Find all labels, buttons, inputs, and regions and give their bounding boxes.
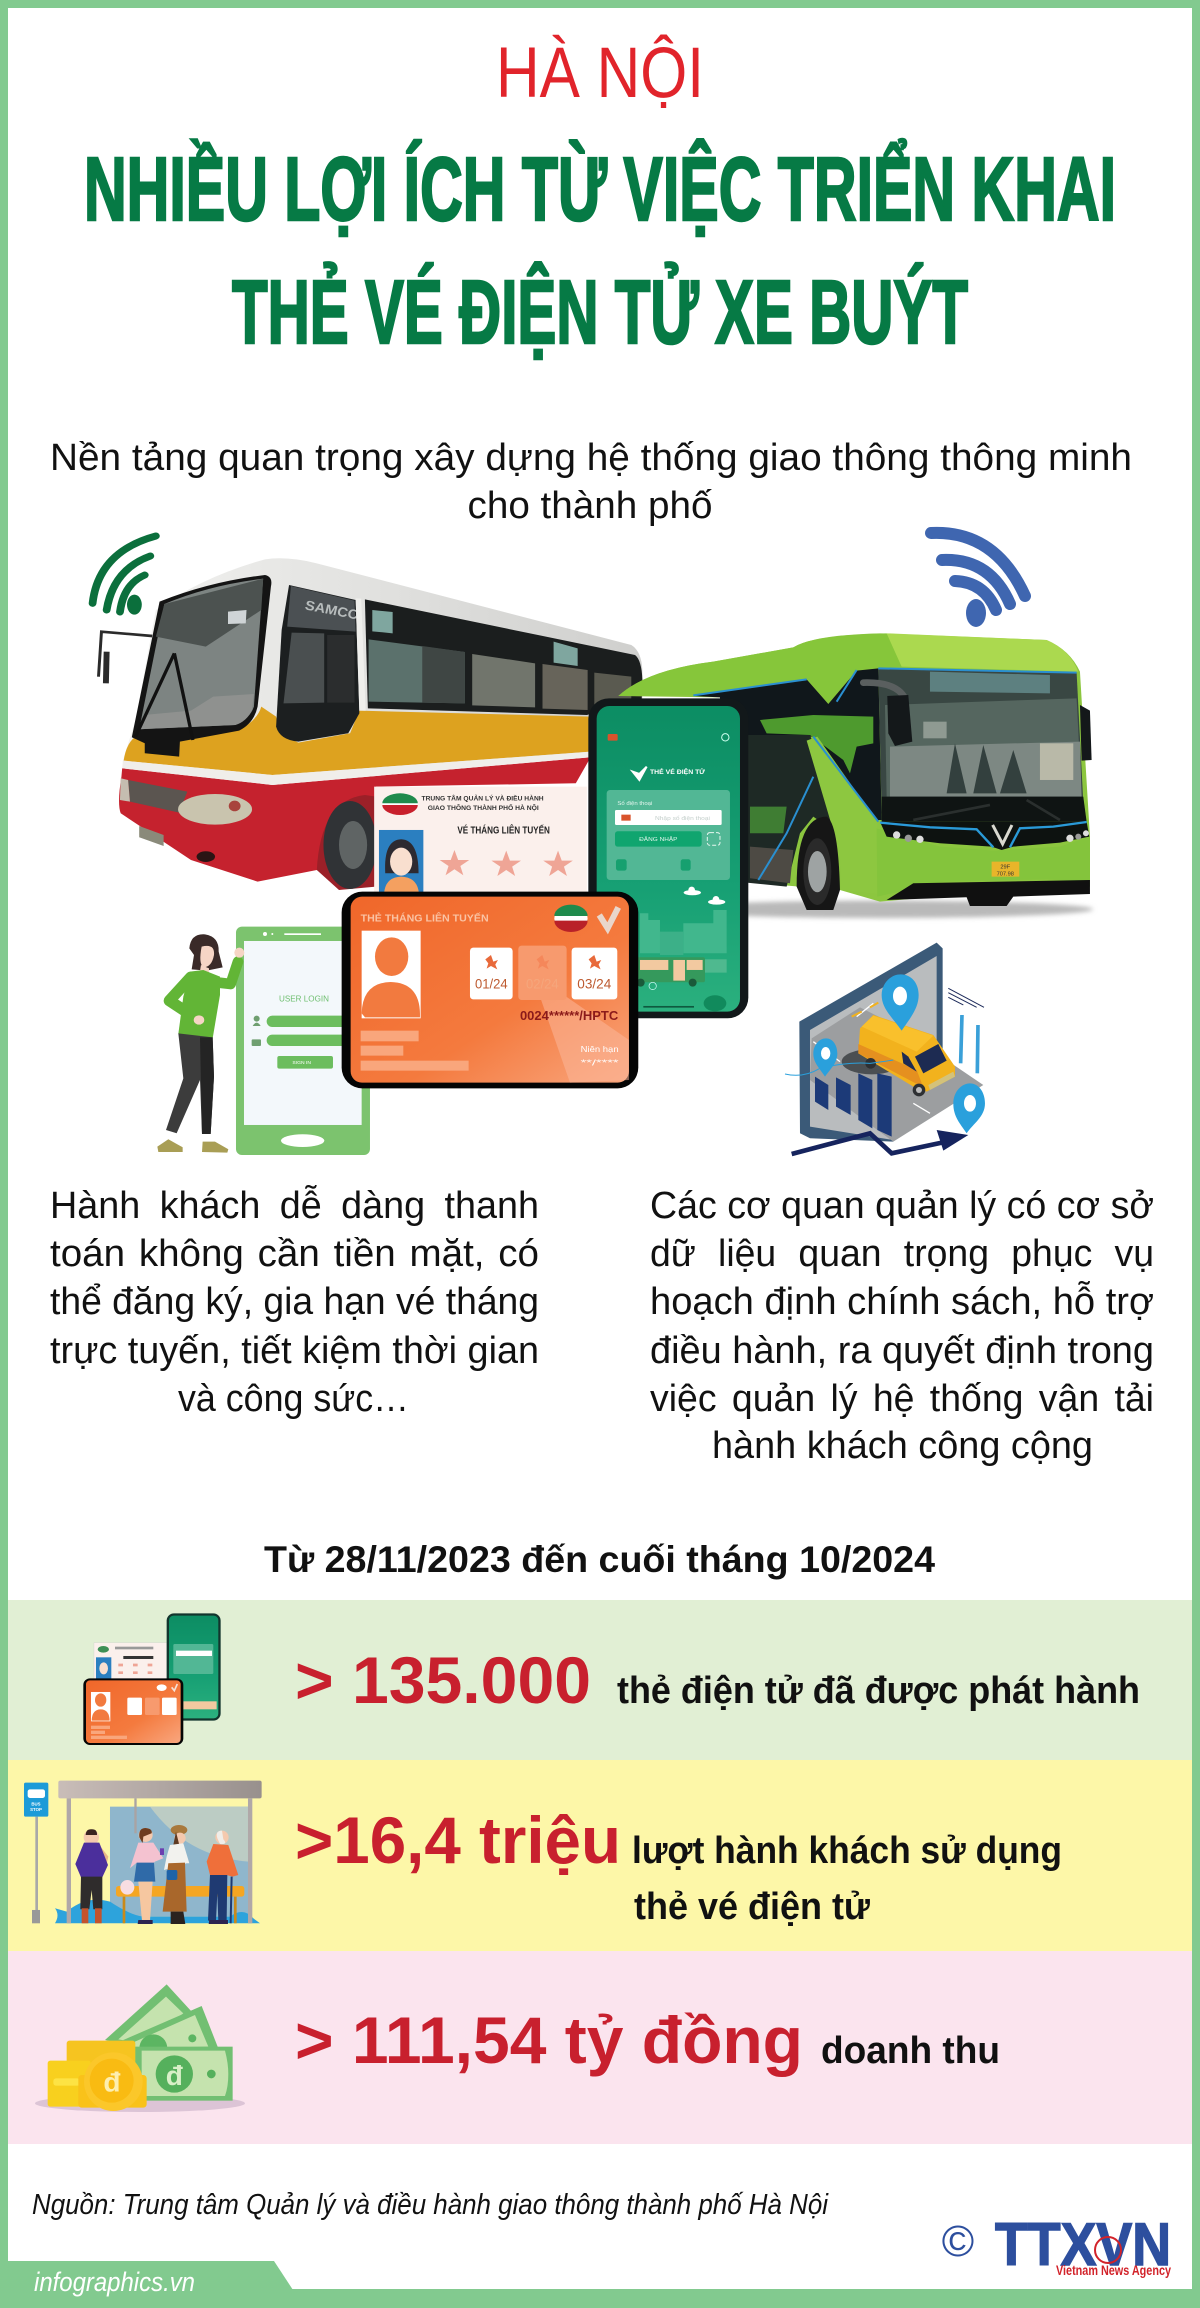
yellow band bbox=[124, 707, 591, 775]
coins: đ bbox=[103, 2067, 121, 2098]
ground shadow bbox=[667, 901, 1093, 918]
icon: van on map screen bbox=[785, 943, 985, 1154]
label: passengers: lượt hành khách sử dụng bbox=[632, 1830, 1062, 1872]
card number: 0024******/HPTC bbox=[520, 1009, 618, 1023]
woman with pink top bbox=[120, 1828, 164, 1924]
card logo and check mark bbox=[554, 905, 618, 932]
text block: passenger benefits: Hành khách dễ dàng thanh bbox=[50, 1184, 539, 1227]
source line: Nguồn: Trung tâm Quản lý và điều hành giao thông thành phố Hà Nội bbox=[32, 2189, 829, 2221]
app header: THẺ VÉ ĐIỆN TỬ bbox=[650, 767, 705, 776]
red lower body bbox=[119, 757, 591, 882]
orange monthly card bbox=[342, 892, 638, 1088]
skirt bbox=[887, 880, 1090, 906]
login panel: Nhập số điện thoại bbox=[655, 816, 710, 822]
e-ticket smartphone bbox=[588, 698, 748, 1018]
ticket portrait bbox=[379, 830, 423, 893]
woman bbox=[157, 934, 244, 1153]
text block: passenger benefits: toán không cần tiền mặt, có bbox=[50, 1233, 539, 1275]
text block: agency benefits: hành khách công cộng bbox=[712, 1425, 1093, 1467]
van bbox=[842, 1015, 955, 1096]
door and SAMCO sign bbox=[276, 585, 361, 742]
paper monthly ticket bbox=[374, 787, 587, 897]
elderly man bbox=[207, 1831, 238, 1924]
front grille and V logo bbox=[880, 822, 1089, 850]
title bbox=[84, 138, 1116, 363]
month stamps: 01/24 bbox=[475, 976, 508, 992]
card title: THẺ THÁNG LIÊN TUYẾN bbox=[361, 911, 489, 924]
icon: cards and phone bbox=[83, 1613, 221, 1745]
side mirror bbox=[98, 632, 152, 683]
card expiry: Niên hạn bbox=[581, 1044, 619, 1054]
coins bbox=[48, 2041, 147, 2111]
phone body bbox=[236, 927, 370, 1155]
trend arrow bbox=[792, 1130, 968, 1154]
month stamps: 03/24 bbox=[577, 976, 611, 992]
clouds and city bbox=[640, 887, 727, 955]
shelter bbox=[55, 1781, 262, 1923]
red and yellow city bus bbox=[98, 558, 642, 890]
door and SAMCO sign: SAMCO bbox=[304, 597, 361, 622]
front wheel bbox=[317, 795, 377, 890]
front wheel bbox=[797, 817, 840, 910]
heading: location: HÀ NỘI bbox=[496, 34, 704, 113]
route line bbox=[785, 1060, 893, 1075]
figure: cards issued: > 135.000 bbox=[295, 1643, 591, 1717]
text block: agency benefits bbox=[650, 1185, 1154, 1467]
login form: USER LOGIN bbox=[279, 993, 329, 1003]
footer tab: infographics.vn bbox=[34, 2267, 195, 2297]
headlights and grille bbox=[120, 778, 252, 862]
bus stop sign: STOP bbox=[30, 1807, 42, 1812]
bus roof and body bbox=[123, 558, 642, 777]
banknotes: đ bbox=[166, 2060, 183, 2091]
windshield bbox=[878, 668, 1087, 822]
month stamps bbox=[470, 946, 617, 1000]
label: passengers bbox=[632, 1830, 1062, 1928]
ticket stars bbox=[440, 850, 573, 876]
monitor bbox=[799, 943, 983, 1142]
number plate: 29F bbox=[1000, 865, 1011, 871]
label: revenue: doanh thu bbox=[821, 2030, 1000, 2072]
mini bus on the phone bbox=[637, 957, 727, 1011]
text block: passenger benefits bbox=[50, 1184, 539, 1420]
text block: agency benefits: hoạch định chính sách, hỗ trợ bbox=[650, 1280, 1154, 1323]
login form bbox=[252, 993, 353, 1069]
text block: passenger benefits: thể đăng ký, gia hạn vé tháng bbox=[50, 1281, 539, 1323]
bar chart bbox=[815, 1073, 892, 1137]
text block: agency benefits: điều hành, ra quyết định trong bbox=[650, 1330, 1154, 1372]
mirrors bbox=[863, 683, 1092, 761]
side glass bbox=[693, 668, 882, 887]
text block: agency benefits: dữ liệu quan trọng phục vụ bbox=[650, 1233, 1154, 1275]
subtitle bbox=[50, 437, 1132, 527]
location pins bbox=[813, 974, 985, 1133]
card expiry bbox=[581, 1044, 620, 1067]
login panel: Số điện thoại bbox=[617, 801, 652, 807]
ticket title: VÉ THÁNG LIÊN TUYẾN bbox=[457, 824, 550, 836]
login phone illustration with woman bbox=[157, 927, 370, 1155]
side data marks bbox=[948, 988, 984, 1073]
card expiry: **/**** bbox=[581, 1057, 620, 1067]
ticket logo bbox=[382, 793, 418, 815]
ticket heading: GIAO THÔNG THÀNH PHỐ HÀ NỘI bbox=[428, 802, 539, 812]
young man bbox=[75, 1829, 108, 1923]
label: passengers: thẻ vé điện tử bbox=[634, 1886, 870, 1928]
side door panel bbox=[807, 737, 877, 894]
icon: bus stop with passengers bbox=[24, 1781, 262, 1924]
text block: agency benefits: Các cơ quan quản lý có cơ sở bbox=[650, 1185, 1154, 1227]
green electric bus bbox=[618, 633, 1093, 918]
ticket heading bbox=[422, 793, 544, 812]
panel: passengers bbox=[8, 1760, 1192, 1951]
windshield bbox=[132, 575, 271, 757]
label: cards issued: thẻ điện tử đã được phát hành bbox=[617, 1670, 1140, 1712]
panel: cards issued bbox=[8, 1600, 1192, 1760]
login panel bbox=[607, 790, 730, 880]
icon: coins and banknotes bbox=[35, 1984, 245, 2112]
icon: blue wifi bbox=[931, 533, 1025, 627]
logo: TTXVN: TTXVN bbox=[995, 2211, 1171, 2278]
figure: revenue: > 111,54 tỷ đồng bbox=[295, 2003, 803, 2077]
blue trim bbox=[693, 668, 1077, 880]
subtitle: Nền tảng quan trọng xây dựng hệ thống giao thông thông minh bbox=[50, 437, 1132, 479]
card watermark shape bbox=[540, 990, 629, 1083]
card portrait bbox=[362, 931, 421, 1018]
copyright symbol: © bbox=[942, 2217, 974, 2266]
figure: passengers: >16,4 triệu bbox=[295, 1803, 621, 1877]
number plate bbox=[992, 862, 1019, 877]
date heading: Từ 28/11/2023 đến cuối tháng 10/2024 bbox=[264, 1539, 935, 1580]
bus stop sign: BUS bbox=[31, 1801, 41, 1806]
footer tab bbox=[8, 2261, 293, 2297]
text block: agency benefits: việc quản lý hệ thống vận tải bbox=[650, 1378, 1154, 1420]
side windows bbox=[356, 598, 642, 715]
subtitle: cho thành phố bbox=[468, 485, 712, 527]
ticket heading: TRUNG TÂM QUẢN LÝ VÀ ĐIỀU HÀNH bbox=[422, 793, 544, 803]
icon: green wifi bbox=[93, 536, 156, 615]
month stamps: 02/24 bbox=[526, 976, 559, 992]
bus stop sign bbox=[24, 1783, 48, 1923]
banknotes bbox=[105, 1984, 233, 2101]
login form: SIGN IN bbox=[292, 1060, 311, 1066]
login panel: ĐĂNG NHẬP bbox=[639, 836, 678, 843]
app header bbox=[608, 734, 729, 780]
front bumper bbox=[877, 828, 1090, 897]
number plate: 707.98 bbox=[997, 871, 1014, 877]
panel: revenue bbox=[8, 1951, 1192, 2144]
text block: passenger benefits: trực tuyến, tiết kiệm thời gian bbox=[50, 1330, 539, 1372]
woman with hat bbox=[163, 1825, 189, 1924]
card detail bars bbox=[361, 1031, 469, 1071]
text block: passenger benefits: và công sức… bbox=[178, 1378, 409, 1420]
bus body bbox=[618, 633, 1090, 902]
